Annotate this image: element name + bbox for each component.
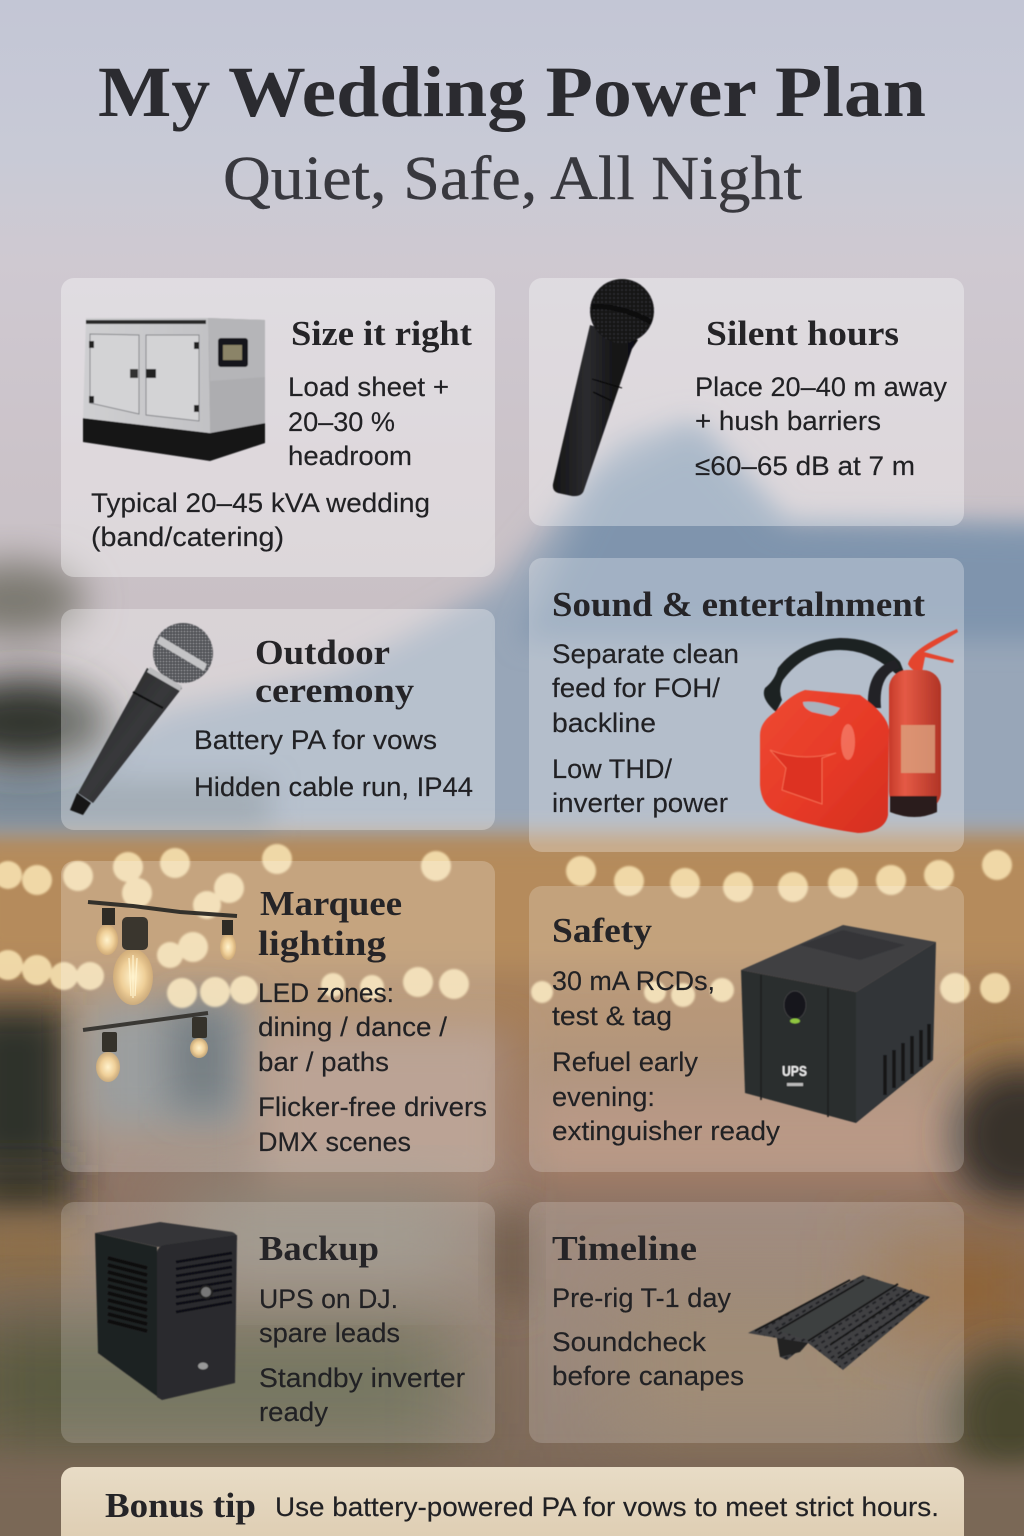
body text <box>552 966 781 1146</box>
body text: Low THD/ <box>552 754 672 784</box>
body text: Load sheet + <box>288 372 449 402</box>
panel: timeline <box>529 1202 964 1443</box>
heading: Safety <box>552 911 653 950</box>
heading: Marquee <box>260 884 402 923</box>
heading: Backup <box>259 1229 379 1268</box>
body text <box>258 978 487 1157</box>
panel: silent hours <box>529 278 964 526</box>
callout text: Use battery-powered PA for vows to meet strict hours. <box>275 1492 939 1522</box>
subtitle: Quiet, Safe, All Night <box>223 145 802 213</box>
icon: generator <box>83 318 265 461</box>
heading: Timeline <box>552 1229 697 1268</box>
icon: microphone <box>70 623 213 815</box>
body text: Separate clean <box>552 639 739 669</box>
panel: sound and entertainment <box>529 558 964 852</box>
body text: 30 mA RCDs, <box>552 966 715 996</box>
body text: headroom <box>288 441 412 471</box>
body text: 20–30 % <box>288 407 395 437</box>
panel: marquee lighting <box>61 861 495 1172</box>
title: My Wedding Power Plan <box>98 52 926 132</box>
body text: feed for FOH/ <box>552 673 721 703</box>
body text: Standby inverter <box>259 1363 465 1393</box>
body text: Hidden cable run, IP44 <box>194 772 473 802</box>
icon: string lights <box>83 902 237 1082</box>
heading: Silent hours <box>706 314 899 353</box>
body text: spare leads <box>259 1318 400 1348</box>
body text: dining / dance / <box>258 1012 448 1042</box>
panel: outdoor ceremony <box>61 609 495 830</box>
icon: standby inverter box <box>95 1222 237 1400</box>
panel: safety <box>529 886 964 1172</box>
body text: Flicker-free drivers <box>258 1092 487 1122</box>
body text: before canapes <box>552 1361 744 1391</box>
heading <box>258 884 402 963</box>
heading: Outdoor <box>255 633 390 672</box>
body text: LED zones: <box>258 978 394 1008</box>
body text: DMX scenes <box>258 1127 411 1157</box>
body text: Place 20–40 m away <box>695 372 947 402</box>
icon: UPS unit: UPS <box>782 1063 807 1080</box>
heading: ceremony <box>255 671 415 710</box>
body text <box>552 1283 744 1391</box>
body text: inverter power <box>552 788 728 818</box>
body text: (band/catering) <box>91 522 284 552</box>
body text: Soundcheck <box>552 1327 707 1357</box>
body text: test & tag <box>552 1001 672 1031</box>
body text: Refuel early <box>552 1047 698 1077</box>
heading: Sound & entertalnment <box>552 585 925 624</box>
heading: lighting <box>258 924 387 963</box>
body text: Pre-rig T-1 day <box>552 1283 731 1313</box>
heading <box>255 633 415 710</box>
body text: backline <box>552 708 656 738</box>
body text: UPS on DJ. <box>259 1284 398 1314</box>
icon: cable ramp <box>748 1275 930 1370</box>
body text: ready <box>259 1397 329 1427</box>
body text <box>259 1284 465 1427</box>
callout: bonus tip <box>61 1467 964 1536</box>
panel: size it right <box>61 278 495 577</box>
icon: microphone <box>553 279 654 496</box>
body text: bar / paths <box>258 1047 389 1077</box>
icon: UPS unit <box>741 925 936 1123</box>
body text <box>91 372 449 552</box>
body text: extinguisher ready <box>552 1116 781 1146</box>
body text: Battery PA for vows <box>194 725 437 755</box>
body text <box>695 372 947 481</box>
icon: fuel can and fire extinguisher <box>760 629 958 833</box>
body text: ≤60–65 dB at 7 m <box>695 451 915 481</box>
heading: Size it right <box>291 314 472 353</box>
body text: + hush barriers <box>695 406 881 436</box>
panel: backup <box>61 1202 495 1443</box>
body text <box>552 639 739 818</box>
body text: evening: <box>552 1082 655 1112</box>
body text: Typical 20–45 kVA wedding <box>91 488 430 518</box>
callout heading: Bonus tip <box>105 1486 256 1525</box>
body text <box>194 725 473 802</box>
